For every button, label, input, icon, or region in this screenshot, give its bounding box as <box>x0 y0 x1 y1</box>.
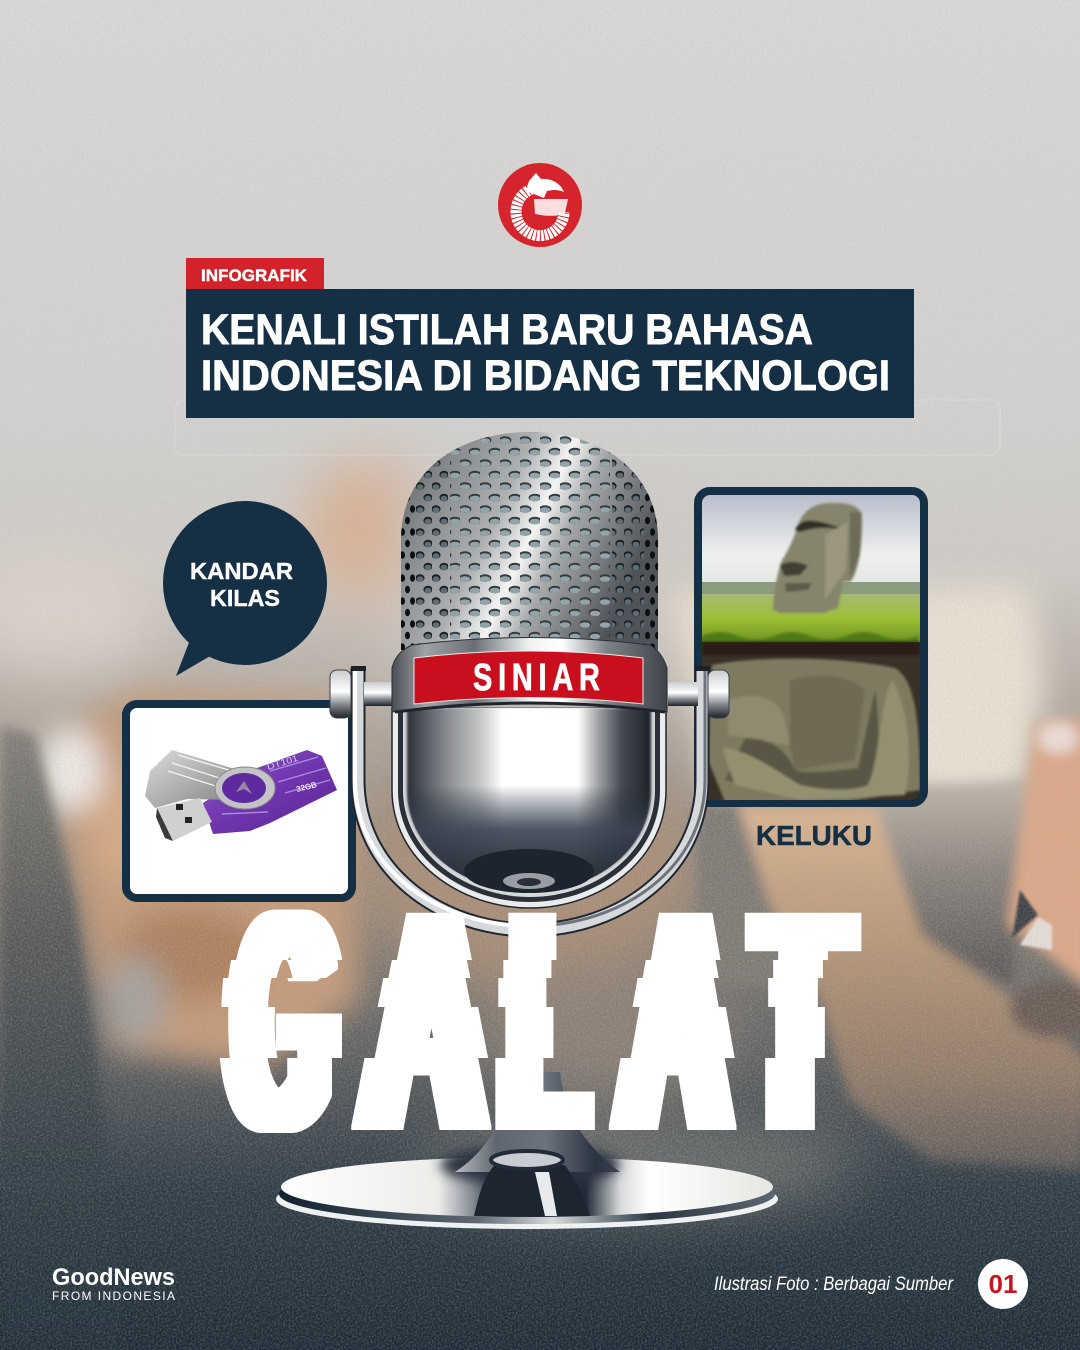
headline: glitched GALAT: T <box>747 847 839 1194</box>
title block <box>186 289 914 418</box>
headline: glitched GALAT <box>220 910 862 1133</box>
footer: GoodNews logo <box>52 1264 175 1303</box>
headline: glitched GALAT: A <box>629 848 736 1194</box>
icon: purple swivel flash drive: 32GB <box>295 780 318 794</box>
headline: glitched GALAT: A <box>622 848 729 1194</box>
page number <box>978 1259 1028 1309</box>
headline: glitched GALAT: L <box>500 847 585 1194</box>
mic label: SINIAR <box>414 651 643 704</box>
headline: glitched GALAT: A <box>632 848 739 1194</box>
mic connectors and knobs <box>330 666 729 718</box>
headline: glitched GALAT: T <box>757 847 849 1194</box>
headline: glitched GALAT: A <box>364 847 485 1194</box>
speech bubble: KANDAR KILAS <box>163 501 327 676</box>
mic base <box>276 1072 778 1229</box>
mic grille <box>400 430 660 652</box>
headline: glitched GALAT: A <box>371 847 492 1194</box>
headline: glitched GALAT: A <box>361 847 482 1194</box>
illustration: moai buried in soil <box>700 495 920 802</box>
tag: INFOGRAFIK: INFOGRAFIK <box>201 266 308 285</box>
mic lower body <box>392 708 666 908</box>
tag: INFOGRAFIK <box>186 258 324 290</box>
headline: glitched GALAT: G <box>227 849 326 1195</box>
headline: glitched GALAT: A <box>619 848 726 1194</box>
headline: glitched GALAT: L <box>503 847 588 1194</box>
footer: photo credit: Ilustrasi Foto : Berbagai Sumber <box>714 1274 954 1295</box>
headline: glitched GALAT: G <box>240 849 339 1195</box>
headline: glitched GALAT: T <box>754 847 846 1194</box>
headline: glitched GALAT: A <box>374 847 495 1194</box>
title block: KENALI ISTILAH BARU BAHASA <box>201 306 813 354</box>
image panel: Moai statue KELUKU <box>698 491 924 803</box>
headline: glitched GALAT: G <box>235 849 334 1195</box>
headline: glitched GALAT: L <box>513 847 598 1194</box>
headline: glitched GALAT: T <box>744 847 836 1194</box>
headline: glitched GALAT: L <box>508 847 593 1194</box>
headline: glitched GALAT: G <box>230 849 329 1195</box>
footer: GoodNews logo: FROM INDONESIA <box>52 1289 175 1303</box>
footer: GoodNews logo: GoodNews <box>52 1264 175 1291</box>
logo: red circular Garuda emblem <box>498 163 582 247</box>
headline: glitched GALAT: A <box>627 848 734 1194</box>
image panel: USB flash drive <box>126 704 352 898</box>
mic yoke: chrome U-shaped stand <box>355 668 705 930</box>
title block: INDONESIA DI BIDANG TEKNOLOGI <box>201 352 890 400</box>
speech bubble: KANDAR KILAS: KILAS <box>210 585 280 611</box>
headline: glitched GALAT: G <box>237 849 336 1195</box>
headline: glitched GALAT: T <box>752 847 844 1194</box>
mic label: SINIAR: SINIAR <box>473 656 600 699</box>
speech bubble: KANDAR KILAS: KANDAR <box>190 558 293 584</box>
icon: purple swivel flash drive: DT101 <box>266 753 299 772</box>
headline: glitched GALAT: L <box>510 847 595 1194</box>
page number: 01 <box>989 1269 1017 1299</box>
caption: KELUKU: KELUKU <box>756 820 872 851</box>
microphone <box>276 430 778 1229</box>
icon: purple swivel flash drive <box>145 750 337 841</box>
headline: glitched GALAT: A <box>369 847 490 1194</box>
mic band <box>392 638 667 712</box>
